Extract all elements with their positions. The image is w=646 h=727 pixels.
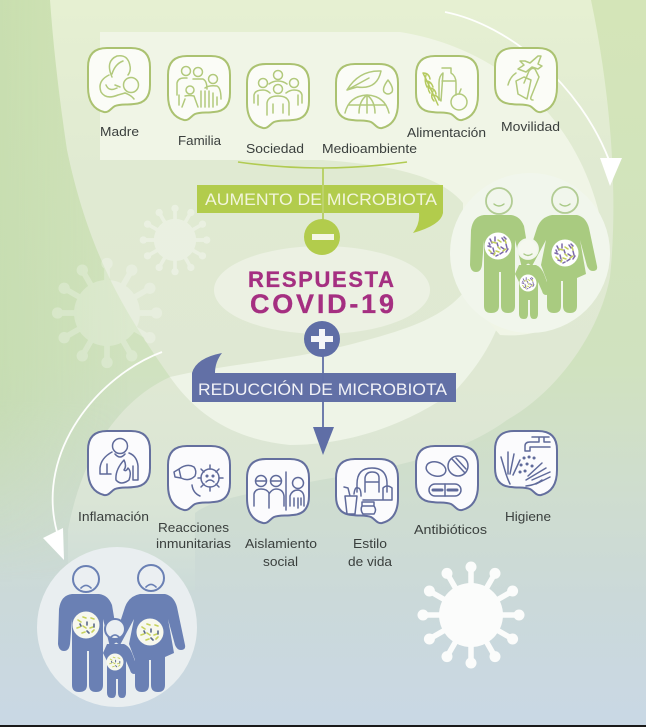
smiles [494, 204, 570, 256]
backdrop circle [37, 547, 197, 707]
figure: unhealthy family [37, 547, 197, 707]
icon: alimentacion [416, 56, 478, 120]
icon: medioambiente [336, 64, 398, 128]
arrow: bottom white curve [43, 352, 162, 560]
label: alimentacion: Alimentación [407, 125, 486, 140]
panel: bottom factors [78, 431, 557, 569]
title: respuesta covid-19: COVID-19 [250, 289, 394, 319]
panel: top factors [88, 48, 560, 156]
banner: aumento de microbiota [197, 185, 443, 233]
icon: minus circle [304, 219, 340, 255]
banner: reduccion de microbiota: REDUCCIÓN DE MICROBIOTA [198, 380, 448, 399]
label: medioambiente: Medioambiente [322, 141, 417, 156]
label: reacciones inmunitarias: Reacciones [158, 520, 230, 535]
backdrop circle [450, 173, 610, 333]
silhouettes [58, 594, 185, 698]
icon: inflamacion [88, 431, 150, 495]
arrow: down blue [313, 427, 334, 455]
label: sociedad: Sociedad [246, 141, 304, 156]
icon: aislamiento social [247, 459, 309, 523]
virus: left large [52, 258, 162, 368]
frowns [81, 584, 156, 637]
label: reacciones inmunitarias [156, 520, 232, 551]
icon: familia [168, 56, 230, 120]
banner: reduccion de microbiota [192, 353, 456, 430]
icon: plus circle [304, 321, 340, 357]
label: estilo de vida [348, 536, 393, 569]
connector: green bracket [238, 162, 407, 225]
label: higiene: Higiene [505, 509, 551, 524]
title: respuesta covid-19 [248, 267, 394, 319]
virus: upper small [140, 205, 210, 275]
label: madre: Madre [100, 124, 139, 139]
icon: higiene [495, 431, 557, 495]
label: inflamacion: Inflamación [78, 509, 149, 524]
silhouettes [470, 215, 597, 319]
icon: reacciones inmunitarias [168, 446, 230, 510]
label: aislamiento social [245, 536, 317, 569]
icon: madre [88, 48, 150, 112]
heads [73, 565, 164, 639]
arrow: top white curve [445, 12, 622, 186]
banner: aumento de microbiota: AUMENTO DE MICROBIOTA [205, 190, 438, 209]
ellipse: respuesta background [214, 246, 430, 334]
label: aislamiento social: Aislamiento [245, 536, 317, 551]
label: estilo de vida: Estilo [353, 536, 387, 551]
microbiota [484, 232, 578, 292]
label: familia: Familia [178, 133, 222, 148]
icon: estilo de vida [336, 459, 398, 523]
label: movilidad: Movilidad [501, 119, 560, 134]
figure: healthy family [450, 173, 610, 333]
label: aislamiento social: social [263, 554, 298, 569]
microbiota [72, 612, 164, 670]
virus: bottom white [418, 562, 524, 668]
icon: sociedad [247, 64, 309, 128]
label: reacciones inmunitarias: inmunitarias [156, 536, 232, 551]
label: antibioticos: Antibióticos [414, 522, 488, 537]
icon: movilidad [495, 48, 557, 112]
heads [486, 187, 578, 259]
title: respuesta covid-19: RESPUESTA [248, 267, 394, 292]
label: estilo de vida: de vida [348, 554, 393, 569]
icon: antibioticos [416, 446, 478, 510]
